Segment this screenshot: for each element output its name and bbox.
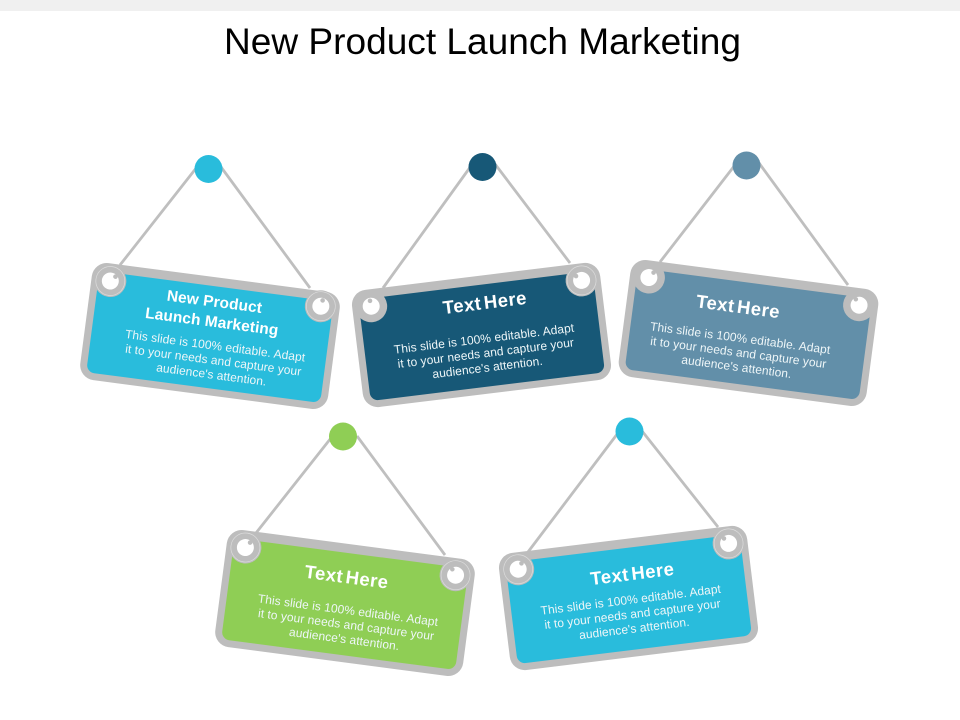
- sign body 3: [617, 258, 880, 408]
- sign body 1: [78, 260, 342, 411]
- sign 1 heading: New Product: [166, 288, 263, 317]
- strings: sign 3: [660, 163, 848, 285]
- icon: pin 3: [732, 152, 760, 180]
- sign 4 body text: audience's attention.: [288, 625, 400, 653]
- sign 2 body text: it to your needs and capture your: [397, 335, 575, 371]
- sign 1 body text: audience's attention.: [155, 360, 267, 389]
- sign 4 body text: it to your needs and capture your: [257, 606, 435, 643]
- sign 5 body text: it to your needs and capture your: [544, 596, 721, 632]
- sign 3 heading: Text Here: [695, 290, 781, 322]
- sign body 2: [350, 261, 613, 409]
- sign 5 body text: This slide is 100% editable. Adapt: [540, 582, 722, 618]
- sign 2 body text: This slide is 100% editable. Adapt: [393, 321, 575, 357]
- sign 3 body text: it to your needs and capture your: [650, 334, 827, 371]
- strings: sign 2: [383, 164, 570, 288]
- icon: pin 5: [616, 418, 644, 446]
- icon: pin 4: [329, 422, 357, 450]
- sign 5 heading: Text Here: [589, 558, 675, 589]
- strings: sign 1: [120, 167, 310, 288]
- icon: pin 2: [468, 153, 496, 181]
- panel: sign 1 New Product Launch Marketing: [78, 155, 342, 411]
- panel: sign 4: [213, 422, 477, 678]
- sign 5 body text: audience's attention.: [578, 615, 690, 642]
- panel: sign 5: [497, 418, 760, 672]
- sign 1 body text: it to your needs and capture your: [124, 342, 302, 379]
- strings: sign 5: [528, 431, 718, 552]
- sign 4 body text: This slide is 100% editable. Adapt: [257, 591, 439, 629]
- sign body 5: [497, 524, 760, 672]
- sign 1 heading: Launch Marketing: [144, 305, 279, 339]
- sign body 4: [213, 528, 477, 678]
- panel: sign 2: [350, 153, 613, 409]
- sign 3 body text: audience's attention.: [681, 353, 792, 381]
- title: New Product Launch Marketing: [224, 20, 741, 62]
- sign 3 body text: This slide is 100% editable. Adapt: [649, 319, 832, 357]
- sign 2 heading: Text Here: [442, 287, 528, 318]
- panel: sign 3: [617, 152, 880, 408]
- sign 1 body text: This slide is 100% editable. Adapt: [124, 327, 307, 365]
- top grey band: [0, 0, 960, 11]
- sign 2 body text: audience's attention.: [432, 354, 543, 381]
- icon: pin 1: [194, 155, 222, 183]
- sign 4 heading: Text Here: [304, 561, 390, 593]
- strings: sign 4: [256, 436, 445, 555]
